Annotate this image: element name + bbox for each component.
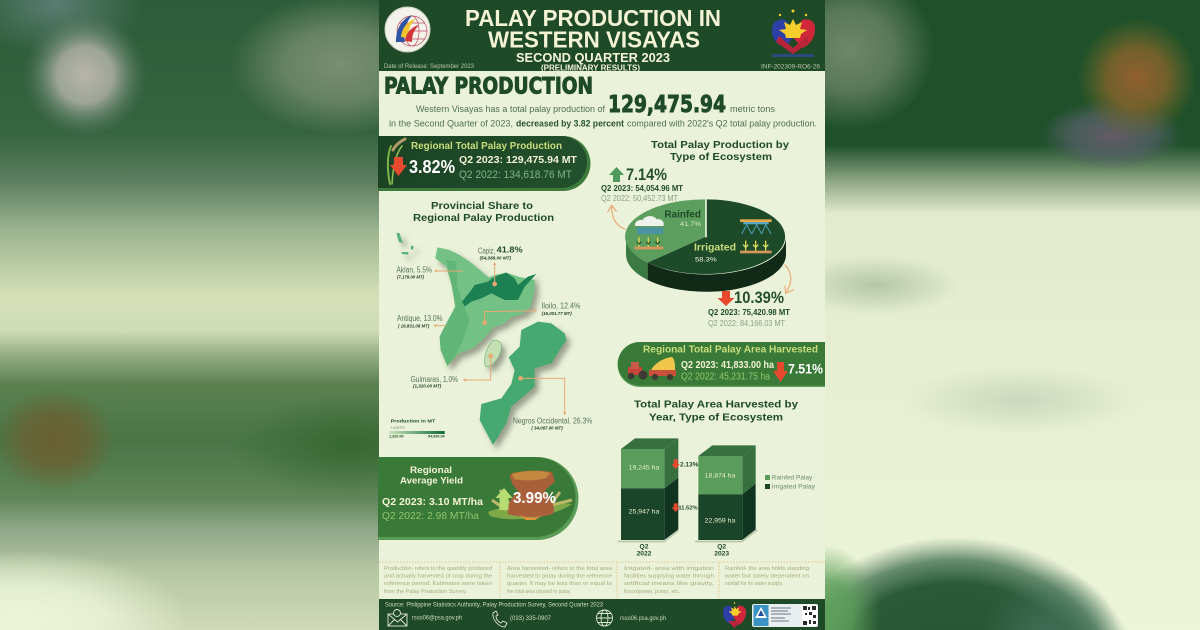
subtitle [516,51,670,72]
icon: red down arrow [390,157,407,176]
icon: red down arrow [773,362,788,382]
source: Source: Philippine Statistics Authority, Palay Production Survey, Second Quarter 2023 [385,602,604,608]
heading: ecosystem production [651,139,789,163]
chart legend: Rainfed Palay [772,475,812,481]
definition: production: and actually harvested of crop during the [384,574,492,580]
definition: production [384,566,492,595]
icon: rain cloud and crops [634,216,664,249]
icon: globe [596,610,612,626]
icon: tractor and harvest truck [628,357,676,380]
icon: small Philippine logo [723,602,746,628]
email address: rsso06@psa.gov.ph [412,616,462,622]
intro text block: compared with 2022's Q2 total palay production. [627,118,817,128]
chart legend: Irrigated Palay [772,484,815,490]
axis labels [637,543,729,558]
definition: rainfed [724,566,809,587]
label: Capiz: 41.8% [497,244,523,254]
Q2 2023 area: Q2 2023: 41,833.00 ha [681,360,775,371]
panel: regional total palay production [378,136,590,191]
irrigated stats: 10.39% [734,288,784,307]
label: Guimaras: Guimaras, 1.0% [411,375,458,384]
label: Capiz: Capiz, [478,246,495,255]
yield heading: Regional [410,465,452,476]
pie sides [626,237,786,292]
rainfed stats [601,165,683,203]
label: Iloilo: (16,001.77 MT) [542,311,572,316]
definition: irrigated: facilities supplying water through [624,574,714,580]
definition: rainfed: Rainfed- the area holds standing [725,566,809,572]
icon: up arrow [496,488,512,510]
bar: Q2 2022: 19,245 ha [629,464,660,471]
map legend: Production in MT [391,419,436,424]
date of release: Date of Release: September 2023 [384,63,474,70]
definition: irrigated: artificial means like gravity, [624,581,715,587]
panel: regional average yield [378,457,578,540]
bar: Q2 2022 [618,438,678,542]
arrow: rainfed to stats [608,205,625,229]
definition: area harvested: quarter. It may be less than or equal to [507,581,612,587]
definition: production: reference period. Estimates were taken [384,581,492,587]
main infographic panel [379,0,825,630]
label: Aklan: Aklan, 5.5% [396,266,432,275]
Q2 2023 value: Q2 2023: 129,475.94 MT [459,154,578,166]
label: Negros Occidental [513,416,592,430]
yield heading [400,465,463,486]
rainfed stats: Q2 2023: 54,054.96 MT [601,184,683,193]
Q2 2022 yield: Q2 2022: 2.98 MT/ha [382,510,479,522]
label: Antique [397,314,443,329]
change: rainfed [672,459,699,469]
bar: Q2 2023 [695,445,758,542]
label: Iloilo [541,302,580,316]
axis labels: 2023 [714,551,729,558]
definition: area harvested: harvested to palay during the reference [507,574,612,580]
label: Guimaras: (1,320.00 MT) [413,383,442,388]
axis labels: 2022 [637,551,652,558]
heading: area harvested chart: Total Palay Area Harvested by [634,398,798,410]
definition: area harvested: Area harvested- refers to the total area [507,566,612,572]
bar: Q2 2022: 25,947 ha [629,508,660,515]
bar chart: area harvested by year [618,438,815,558]
definition: irrigated [624,566,715,595]
heading: area harvested chart: Year, Type of Ecosystem [649,412,783,424]
label: Antique: Antique, 13.0% [397,314,443,323]
rainfed label: Rainfed [664,209,701,220]
rainfed label: 41.7% [680,221,701,228]
label: Capiz [478,244,523,260]
website: rsso06.psa.gov.ph [620,616,666,622]
definitions band [379,562,825,598]
definition: irrigated: Irrigated- area with irrigation [624,566,714,572]
icon: red down arrow [718,291,734,306]
subtitle: SECOND QUARTER 2023 [516,51,670,65]
percent change: 3.99% [513,490,556,507]
axis labels: Q2 [640,543,649,550]
map legend [389,419,446,439]
title: WESTERN VISAYAS [488,26,700,52]
label: Antique: ( 16,831.08 MT) [398,324,430,329]
change: rainfed: 2.13% [680,463,699,469]
panel title: Regional Total Palay Area Harvested [643,344,818,356]
rainfed stats: Q2 2022: 50,452.73 MT [601,194,678,203]
heading: ecosystem production: Type of Ecosystem [670,151,772,163]
intro text block: Western Visayas has a total palay production of [416,104,605,114]
percent change: 3.82% [409,156,455,177]
panel title: Regional Total Palay Production [411,141,562,152]
rainfed slice [625,199,706,263]
definition: production: Production- refers to the quantity produced [384,566,492,572]
phone number: (033) 335-0907 [510,616,552,622]
map: provincial share [389,233,592,445]
Q2 2022 area: Q2 2022: 45,231.75 ha [681,372,770,382]
panel: regional total palay area harvested [618,342,825,387]
percent change: 7.51% [788,362,823,376]
rainfed label [664,209,701,228]
map legend: 54,090.04 [428,435,446,439]
irrigated label: 58.3% [695,257,717,264]
heading: ecosystem production: Total Palay Production by [651,139,789,151]
change: irrigated [672,503,698,512]
label: Aklan [396,266,432,279]
definition: rainfed: water but solely dependent on [724,574,809,580]
heading: provincial share [413,200,554,224]
label: Aklan: (7,178.00 MT) [397,274,425,279]
icon: green up arrow [609,167,624,182]
label: Capiz: (54,088.00 MT) [480,255,512,260]
map shapes [396,233,566,445]
map legend: Legend [391,425,405,430]
irrigated slice [648,199,785,274]
infographic number: INF-202309-RO6-26 [761,64,821,70]
heading: area harvested chart [634,398,798,424]
title [465,5,721,52]
irrigated stats [708,288,790,328]
subtitle: (PRELIMINARY RESULTS) [541,64,640,72]
definition: rainfed: rainfall for its water supply. [725,581,783,587]
pie chart: ecosystem share [608,199,793,293]
icon: Bagong Pilipinas style logo [772,10,815,57]
icon: phone [493,611,507,627]
heading: palay production: PALAY PRODUCTION [384,74,593,100]
irrigated label: Irrigated [694,243,736,254]
heading: provincial share: Regional Palay Production [413,212,554,224]
footer band [379,599,825,630]
axis labels: Q2 [717,543,726,550]
label: Negros Occidental: Negros Occidental, 26.3% [513,416,592,425]
label: Iloilo: Iloilo, 12.4% [541,302,580,311]
heading: provincial share: Provincial Share to [431,200,533,212]
intro text block: decreased by 3.82 percent [516,118,624,128]
map legend: 1,320.00 [389,435,404,439]
yield heading: Average Yield [400,476,463,486]
icon: sprinkler and crops [740,219,772,253]
label: Guimaras [411,375,458,388]
intro text block: metric tons [730,104,775,114]
leader lines [435,264,565,413]
icon: certification badge and QR code [752,604,818,627]
icon: rice sack [488,471,572,520]
Q2 2023 yield: Q2 2023: 3.10 MT/ha [382,496,483,508]
intro text block: in the Second Quarter of 2023, [389,118,513,128]
bar: Q2 2023: 18,874 ha [705,473,736,480]
rainfed stats: 7.14% [626,165,667,184]
definition: area harvested [507,566,612,595]
header band [379,0,825,72]
irrigated label [694,243,736,264]
label: Negros Occidental: ( 34,067.00 MT) [531,425,563,430]
icon: PSA seal [385,7,430,52]
bar: Q2 2023: 22,959 ha [705,517,736,524]
icon: email [388,610,407,626]
chart legend [765,475,815,490]
intro text block: 129,475.94 [608,92,726,118]
irrigated stats: Q2 2022: 84,166.03 MT [708,319,785,328]
icon: rice plant [388,139,405,184]
definition: irrigated: force/power, pump, etc. [624,589,680,595]
arrow: irrigated to stats [785,265,793,293]
Q2 2022 value: Q2 2022: 134,618.76 MT [459,169,572,181]
title: PALAY PRODUCTION IN [465,5,721,31]
definition: production: from the Palay Production Survey. [384,589,467,595]
definition: area harvested: the total area planted to palay. [507,589,571,595]
change: irrigated: 11.52% [678,505,698,511]
intro text block [389,92,817,128]
irrigated stats: Q2 2023: 75,420.98 MT [708,308,790,317]
